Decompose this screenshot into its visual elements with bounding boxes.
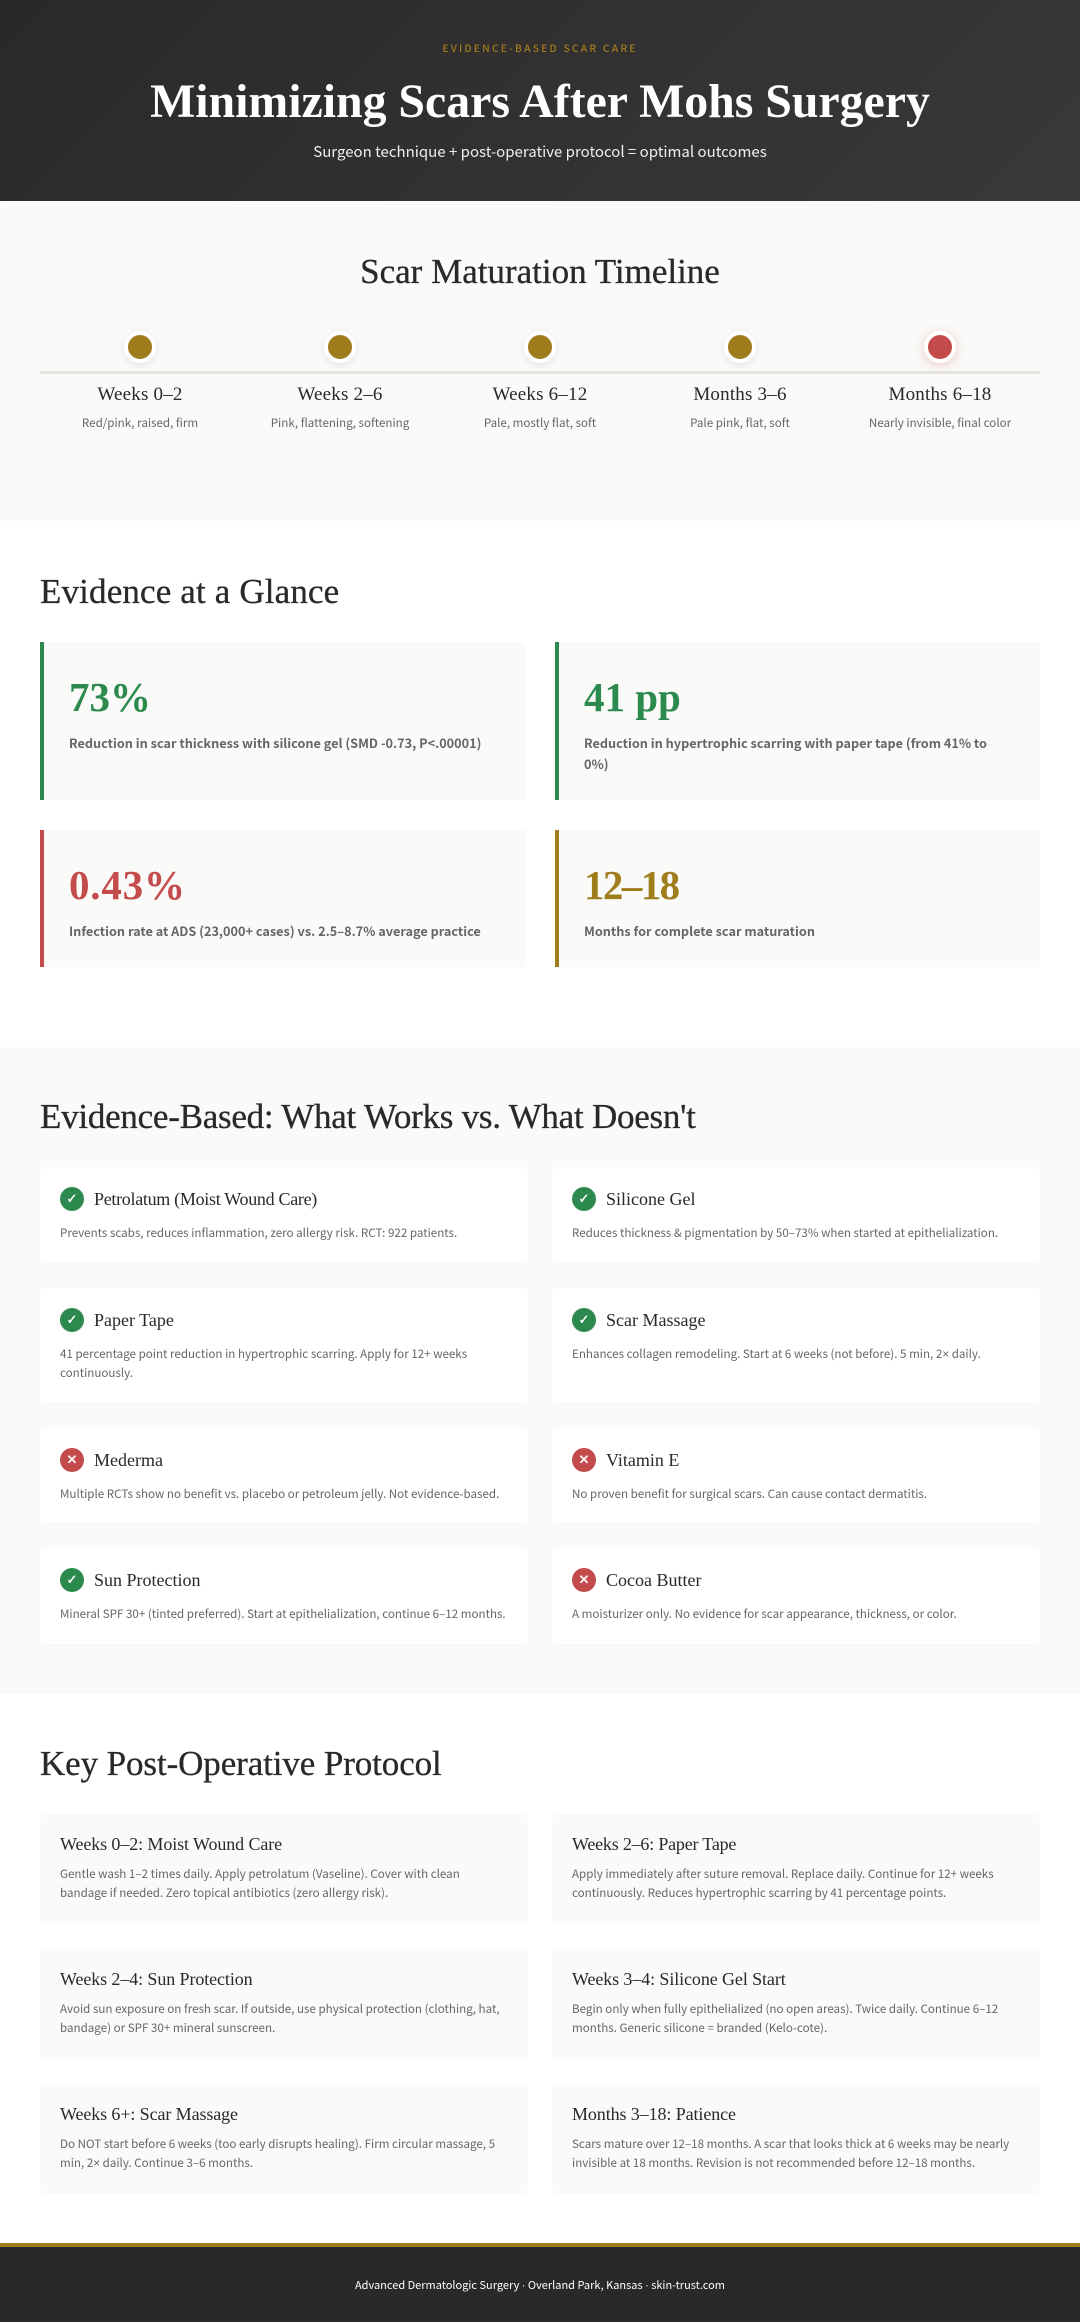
stat card: 73%	[40, 642, 525, 800]
stat label: Infection rate at ADS (23,000+ cases) vs. 2.5–8.7% average practice	[69, 921, 481, 940]
timeline description 2: Pink, flattening, softening	[271, 415, 409, 431]
protocol card: weeks 2-4	[40, 1949, 528, 2059]
header banner	[0, 0, 1080, 201]
timeline label: weeks 0-2: Weeks 0–2	[97, 384, 183, 405]
panel: scar maturation timeline	[0, 201, 1080, 521]
stat label: Months for complete scar maturation	[584, 921, 815, 940]
card title: Sun Protection	[94, 1570, 200, 1590]
card title: Silicone Gel	[606, 1189, 695, 1209]
card: petrolatum	[40, 1167, 528, 1263]
stat label	[584, 733, 987, 773]
card text: Reduces thickness & pigmentation by 50–73% when started at epithelialization.	[572, 1225, 998, 1241]
card text	[60, 2001, 500, 2036]
timeline label: months 3-6: Months 3–6	[693, 384, 787, 405]
card text: bandage if needed. Zero topical antibiotics (zero allergy risk).	[60, 1885, 388, 1901]
card text: Do NOT start before 6 weeks (too early disrupts healing). Firm circular massage, 5	[60, 2136, 495, 2152]
card text	[572, 2136, 1009, 2171]
card text: Apply immediately after suture removal. Replace daily. Continue for 12+ weeks	[572, 1866, 994, 1882]
card text: Scars mature over 12–18 months. A scar that looks thick at 6 weeks may be nearly	[572, 2136, 1009, 2152]
icon: check	[572, 1308, 596, 1332]
timeline label: weeks 6-12: Weeks 6–12	[493, 384, 587, 405]
card text: invisible at 18 months. Revision is not recommended before 12–18 months.	[572, 2155, 975, 2171]
icon: check: ✓	[67, 1573, 77, 1588]
protocol card: weeks 3-4	[552, 1949, 1040, 2059]
card text: Enhances collagen remodeling. Start at 6 weeks (not before). 5 min, 2× daily.	[572, 1346, 981, 1362]
card title: Weeks 3–4: Silicone Gel Start	[572, 1969, 786, 1989]
heading: what works: Evidence-Based: What Works vs. What Doesn't	[40, 1097, 696, 1136]
icon: check: ✓	[67, 1313, 77, 1328]
icon: cross: ✕	[67, 1453, 77, 1468]
card text: No proven benefit for surgical scars. Can cause contact dermatitis.	[572, 1486, 927, 1502]
card text	[60, 1346, 467, 1381]
card title: Petrolatum (Moist Wound Care)	[94, 1189, 317, 1209]
stat value: 41 pp	[584, 674, 681, 720]
stat label: Reduction in scar thickness with silicone gel (SMD -0.73, P<.00001)	[69, 733, 481, 752]
icon: check	[60, 1187, 84, 1211]
icon: timeline dot 5	[924, 331, 956, 363]
icon: cross	[572, 1448, 596, 1472]
card: vitamin e	[552, 1428, 1040, 1523]
subtitle: Surgeon technique + post-operative protocol = optimal outcomes	[313, 141, 767, 162]
card text: Gentle wash 1–2 times daily. Apply petrolatum (Vaseline). Cover with clean	[60, 1866, 460, 1882]
card: scar massage	[552, 1288, 1040, 1403]
stat label: 0%)	[584, 754, 608, 773]
card text	[572, 2001, 998, 2036]
card: mederma	[40, 1428, 528, 1523]
card title: Weeks 2–4: Sun Protection	[60, 1969, 253, 1989]
card text	[60, 1866, 460, 1901]
icon: check: ✓	[579, 1313, 589, 1328]
protocol card: weeks 6+	[40, 2084, 528, 2194]
card: sun protection	[40, 1548, 528, 1644]
footer text: Advanced Dermatologic Surgery · Overland Park, Kansas · skin-trust.com	[355, 2277, 725, 2293]
card text: Prevents scabs, reduces inflammation, zero allergy risk. RCT: 922 patients.	[60, 1225, 457, 1241]
card text: Begin only when fully epithelialized (no open areas). Twice daily. Continue 6–12	[572, 2001, 998, 2017]
timeline description 4: Pale pink, flat, soft	[690, 415, 790, 431]
icon: check	[60, 1568, 84, 1592]
card: paper tape	[40, 1288, 528, 1403]
card text: min, 2× daily. Continue 3–6 months.	[60, 2155, 253, 2171]
timeline description 3: Pale, mostly flat, soft	[484, 415, 596, 431]
protocol card: weeks 0-2	[40, 1814, 528, 1924]
card text: continuously. Reduces hypertrophic scarring by 41 percentage points.	[572, 1885, 946, 1901]
icon: check: ✓	[579, 1192, 589, 1207]
stat card: 12-18	[555, 830, 1040, 967]
card title: Cocoa Butter	[606, 1570, 701, 1590]
card title: Mederma	[94, 1450, 163, 1470]
card title: Months 3–18: Patience	[572, 2104, 736, 2124]
heading: evidence at a glance: Evidence at a Glance	[40, 572, 339, 611]
card text: months. Generic silicone = branded (Kelo-cote).	[572, 2020, 827, 2036]
card text	[60, 2136, 495, 2171]
stat card: 41 pp	[555, 642, 1040, 800]
card text: continuously.	[60, 1365, 133, 1381]
timeline label: weeks 2-6: Weeks 2–6	[297, 384, 383, 405]
card title: Weeks 2–6: Paper Tape	[572, 1834, 736, 1854]
card: silicone gel	[552, 1167, 1040, 1263]
card title: Vitamin E	[606, 1450, 679, 1470]
card title: Weeks 0–2: Moist Wound Care	[60, 1834, 282, 1854]
card title: Paper Tape	[94, 1310, 174, 1330]
timeline track	[40, 371, 1040, 374]
panel: what works vs what doesn't	[0, 1047, 1080, 1694]
card text: bandage) or SPF 30+ mineral sunscreen.	[60, 2020, 275, 2036]
stat value: 73%	[69, 674, 151, 720]
icon: cross	[572, 1568, 596, 1592]
protocol card: months 3-18	[552, 2084, 1040, 2194]
icon: check: ✓	[67, 1192, 77, 1207]
main title: Minimizing Scars After Mohs Surgery	[150, 75, 930, 128]
footer	[0, 2243, 1080, 2322]
heading: key post-operative protocol: Key Post-Operative Protocol	[40, 1744, 442, 1783]
card text	[572, 1866, 994, 1901]
card title: Weeks 6+: Scar Massage	[60, 2104, 238, 2124]
icon: check	[572, 1187, 596, 1211]
card text: Multiple RCTs show no benefit vs. placebo or petroleum jelly. Not evidence-based.	[60, 1486, 499, 1502]
icon: timeline dot 3	[524, 331, 556, 363]
card text: 41 percentage point reduction in hypertrophic scarring. Apply for 12+ weeks	[60, 1346, 467, 1362]
protocol card: weeks 2-6	[552, 1814, 1040, 1924]
icon: cross: ✕	[579, 1573, 589, 1588]
card text: Avoid sun exposure on fresh scar. If outside, use physical protection (clothing, hat,	[60, 2001, 500, 2017]
stat value: 0.43%	[69, 862, 186, 908]
card text: A moisturizer only. No evidence for scar appearance, thickness, or color.	[572, 1606, 957, 1622]
timeline description 5: Nearly invisible, final color	[869, 415, 1011, 431]
timeline heading: Scar Maturation Timeline	[360, 252, 720, 291]
timeline label: months 6-18: Months 6–18	[888, 384, 992, 405]
eyebrow label: EVIDENCE-BASED SCAR CARE	[442, 40, 638, 55]
card: cocoa butter	[552, 1548, 1040, 1644]
icon: timeline dot 4	[724, 331, 756, 363]
icon: timeline dot 2	[324, 331, 356, 363]
icon: cross	[60, 1448, 84, 1472]
stat card: 0.43%	[40, 830, 525, 967]
icon: check	[60, 1308, 84, 1332]
stat value: 12–18	[584, 862, 679, 908]
icon: timeline dot 1	[124, 331, 156, 363]
icon: cross: ✕	[579, 1453, 589, 1468]
card text: Mineral SPF 30+ (tinted preferred). Start at epithelialization, continue 6–12 months.	[60, 1606, 506, 1622]
card title: Scar Massage	[606, 1310, 705, 1330]
timeline description 1: Red/pink, raised, firm	[82, 415, 198, 431]
stat label: Reduction in hypertrophic scarring with paper tape (from 41% to	[584, 733, 987, 752]
